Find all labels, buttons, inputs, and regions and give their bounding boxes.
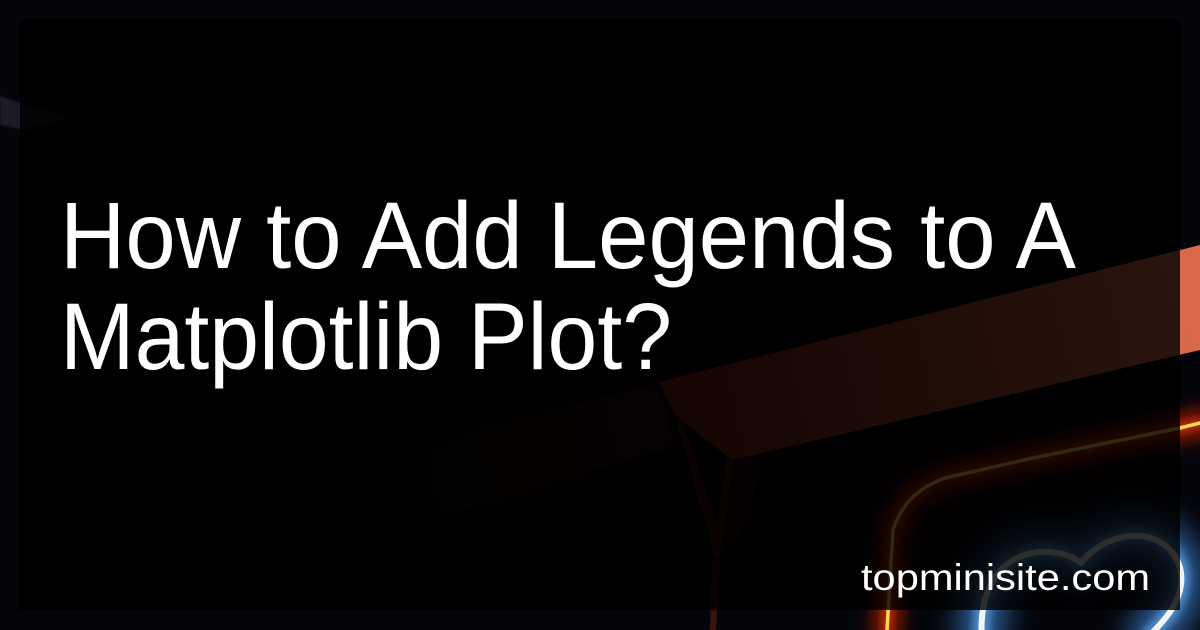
title: Matplotlib Plot? xyxy=(60,284,672,390)
main beam xyxy=(658,245,1200,460)
beam legs xyxy=(676,420,762,630)
site name: topminisite.com xyxy=(861,557,1150,598)
left beam xyxy=(400,385,675,530)
neon line xyxy=(887,423,1200,630)
neon heart xyxy=(982,536,1181,630)
title: How to Add Legends to A xyxy=(60,183,1076,289)
top-left object xyxy=(0,96,70,130)
